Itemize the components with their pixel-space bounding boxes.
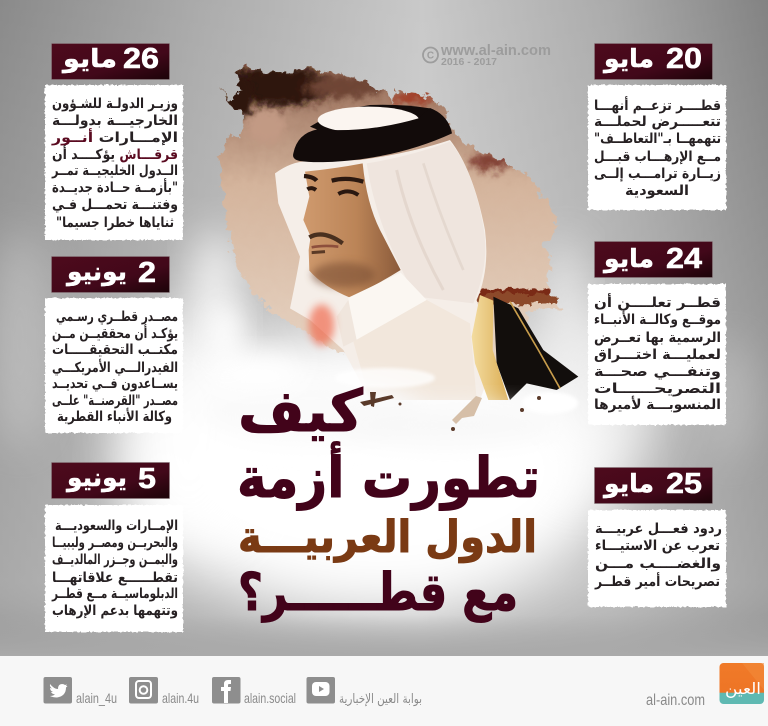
title: كيف [238, 377, 363, 445]
text block: يســاعدون فــي تحديــد [52, 376, 178, 392]
panel: 5 June [45, 462, 183, 632]
brush-shaped photo background [216, 64, 564, 362]
panel: 25 May [588, 468, 726, 607]
date header [52, 43, 170, 80]
date header [594, 242, 712, 278]
panel: 2 June [45, 256, 183, 433]
white collar [348, 273, 427, 342]
handle: alain_4u: alain_4u [76, 690, 117, 706]
text block [52, 309, 178, 425]
text block: لعمليـــة اختـــراق [594, 347, 721, 363]
text block: الدبلوماسيــة مــع قطــر [51, 586, 178, 602]
date header [594, 43, 712, 80]
text block: تعرب عن الاستيـــاء [595, 538, 720, 554]
text block: الخارجيـــة بدولـــة [52, 113, 178, 129]
date header [52, 462, 170, 498]
text block: تقطــــــع علاقاتهـــا [52, 570, 178, 586]
date header: 25 [666, 468, 702, 500]
watermark: website and years: C [427, 50, 434, 62]
text block [51, 96, 178, 231]
text block: وكالة الأنباء القطرية [57, 408, 172, 425]
text block: تتهمهــا بـ"التعاطــف" [594, 131, 721, 147]
title: مع قطــــــر؟ [238, 563, 518, 623]
handle: alain.4u: alain.4u [162, 690, 199, 706]
face [303, 163, 401, 298]
text block: وتتهمها بدعم الإرهاب [52, 603, 178, 619]
title: الدول العربيـــة [238, 512, 537, 563]
watermark: website and years [423, 42, 551, 68]
date header [594, 468, 712, 504]
text card [45, 505, 183, 632]
text block: مــع الإرهـــاب قبـــل [594, 149, 721, 165]
text block: الفيدرالـــي الأمريكـــي [52, 359, 178, 376]
text card [588, 85, 726, 210]
title: تطورت أزمة [237, 441, 540, 511]
date header: مايو [61, 44, 117, 74]
watermark: website and years: 2016 - 2017 [441, 57, 497, 68]
text block: التصريحــــــات [594, 381, 721, 397]
date header: 26 [123, 43, 159, 75]
kaffiyeh headdress [275, 140, 493, 400]
text block: قطــر تعلــــن أن [594, 293, 721, 311]
gold trim [472, 295, 508, 400]
text block: والغضــــب مـــن [595, 556, 721, 572]
text block [594, 293, 721, 413]
text block: مصــدر قطــري رسـمي [56, 309, 178, 326]
text block: ردود فعـــل عربيـــة [595, 521, 722, 537]
red shoulder flare [309, 304, 334, 346]
text block: المنسوبـــة لأميرها [594, 396, 721, 413]
title [237, 377, 540, 623]
portrait illustration on torn brush background [210, 60, 580, 400]
text block: مكتــب التحقيقـــــات [52, 342, 178, 358]
date header [52, 256, 170, 292]
date header: يونيو [65, 257, 127, 287]
text card [588, 510, 726, 607]
text block: وفتنـــة تحمـــل فـي [52, 197, 178, 213]
text block: السعودية [625, 183, 689, 199]
date header: يونيو [65, 463, 127, 493]
white dome of headdress [318, 107, 419, 133]
text block: ثناياها خطرا جسيما" [56, 215, 174, 231]
icon: youtube [306, 677, 335, 704]
logo [720, 663, 764, 704]
date header: 5 [138, 463, 156, 495]
text card [45, 85, 183, 240]
text block: مصــدر "القرصنــة" علــى [52, 393, 178, 409]
panel: 24 May [588, 242, 726, 425]
eyebrows and eyes [304, 176, 363, 195]
text block [594, 96, 721, 199]
black bisht cloak [493, 297, 578, 400]
text block: "بأزمــة حــادة جديــدة [52, 178, 178, 196]
date header: مايو [602, 44, 654, 74]
date header: 20 [666, 43, 702, 75]
black agal ring, back [310, 105, 443, 140]
panel: 20 May [588, 43, 726, 210]
icon: facebook [212, 677, 240, 704]
text block: الرسمية بها تعــرض [594, 330, 721, 346]
text block [594, 521, 722, 590]
paint splatter near title [360, 392, 541, 431]
icon: twitter [44, 677, 72, 704]
text block: الإمـــارات أنــور [51, 128, 178, 146]
text block: موقــع وكالــة الأنبــاء [594, 311, 721, 328]
text block: زيــارة ترامـــب إلــى [594, 166, 721, 182]
black agal ring, front [293, 108, 452, 162]
handle: alain.social: alain.social [244, 690, 296, 706]
website address: al-ain.com [646, 692, 705, 709]
date header: مايو [602, 244, 654, 274]
date header: 24 [666, 243, 702, 275]
text block: وزيـر الدولـة للشـؤون [52, 96, 178, 112]
text card [588, 284, 726, 425]
panel: 26 May [45, 43, 183, 240]
date header: مايو [602, 469, 654, 499]
text block: تتعـــــرض لحملـــة [594, 114, 721, 130]
date header: 2 [138, 257, 156, 289]
text block: الإمــارات والسعوديـــة [55, 518, 178, 534]
handle: Arabic portal name: بوابة العين الإخبارية [339, 692, 422, 707]
foreground clouds [200, 305, 578, 445]
icon: instagram [129, 677, 158, 704]
text block: والبحريــن ومصــر وليبيــا [52, 535, 178, 551]
footer [0, 656, 768, 726]
watermark: website and years: www.al-ain.com [440, 42, 551, 59]
text card [45, 298, 183, 433]
logo: العين [725, 679, 761, 699]
text block [51, 518, 178, 619]
text block: قطــــر تزعــم أنهـــا [594, 96, 721, 114]
text block: تصريحات أمير قطــر [594, 572, 720, 590]
text block: يؤكـد أن محققيــن مــن [52, 324, 178, 342]
text block: وتنفـــي صحـــة [594, 364, 721, 380]
text block: قرقـــاش يؤكــــد أن [52, 145, 178, 163]
moustache and mouth [309, 234, 343, 253]
text block: واليمــن وجــزر المالديــف [52, 552, 178, 568]
text block: الــدول الخليجيــة تمــر [51, 163, 178, 179]
background clouds [0, 230, 768, 656]
